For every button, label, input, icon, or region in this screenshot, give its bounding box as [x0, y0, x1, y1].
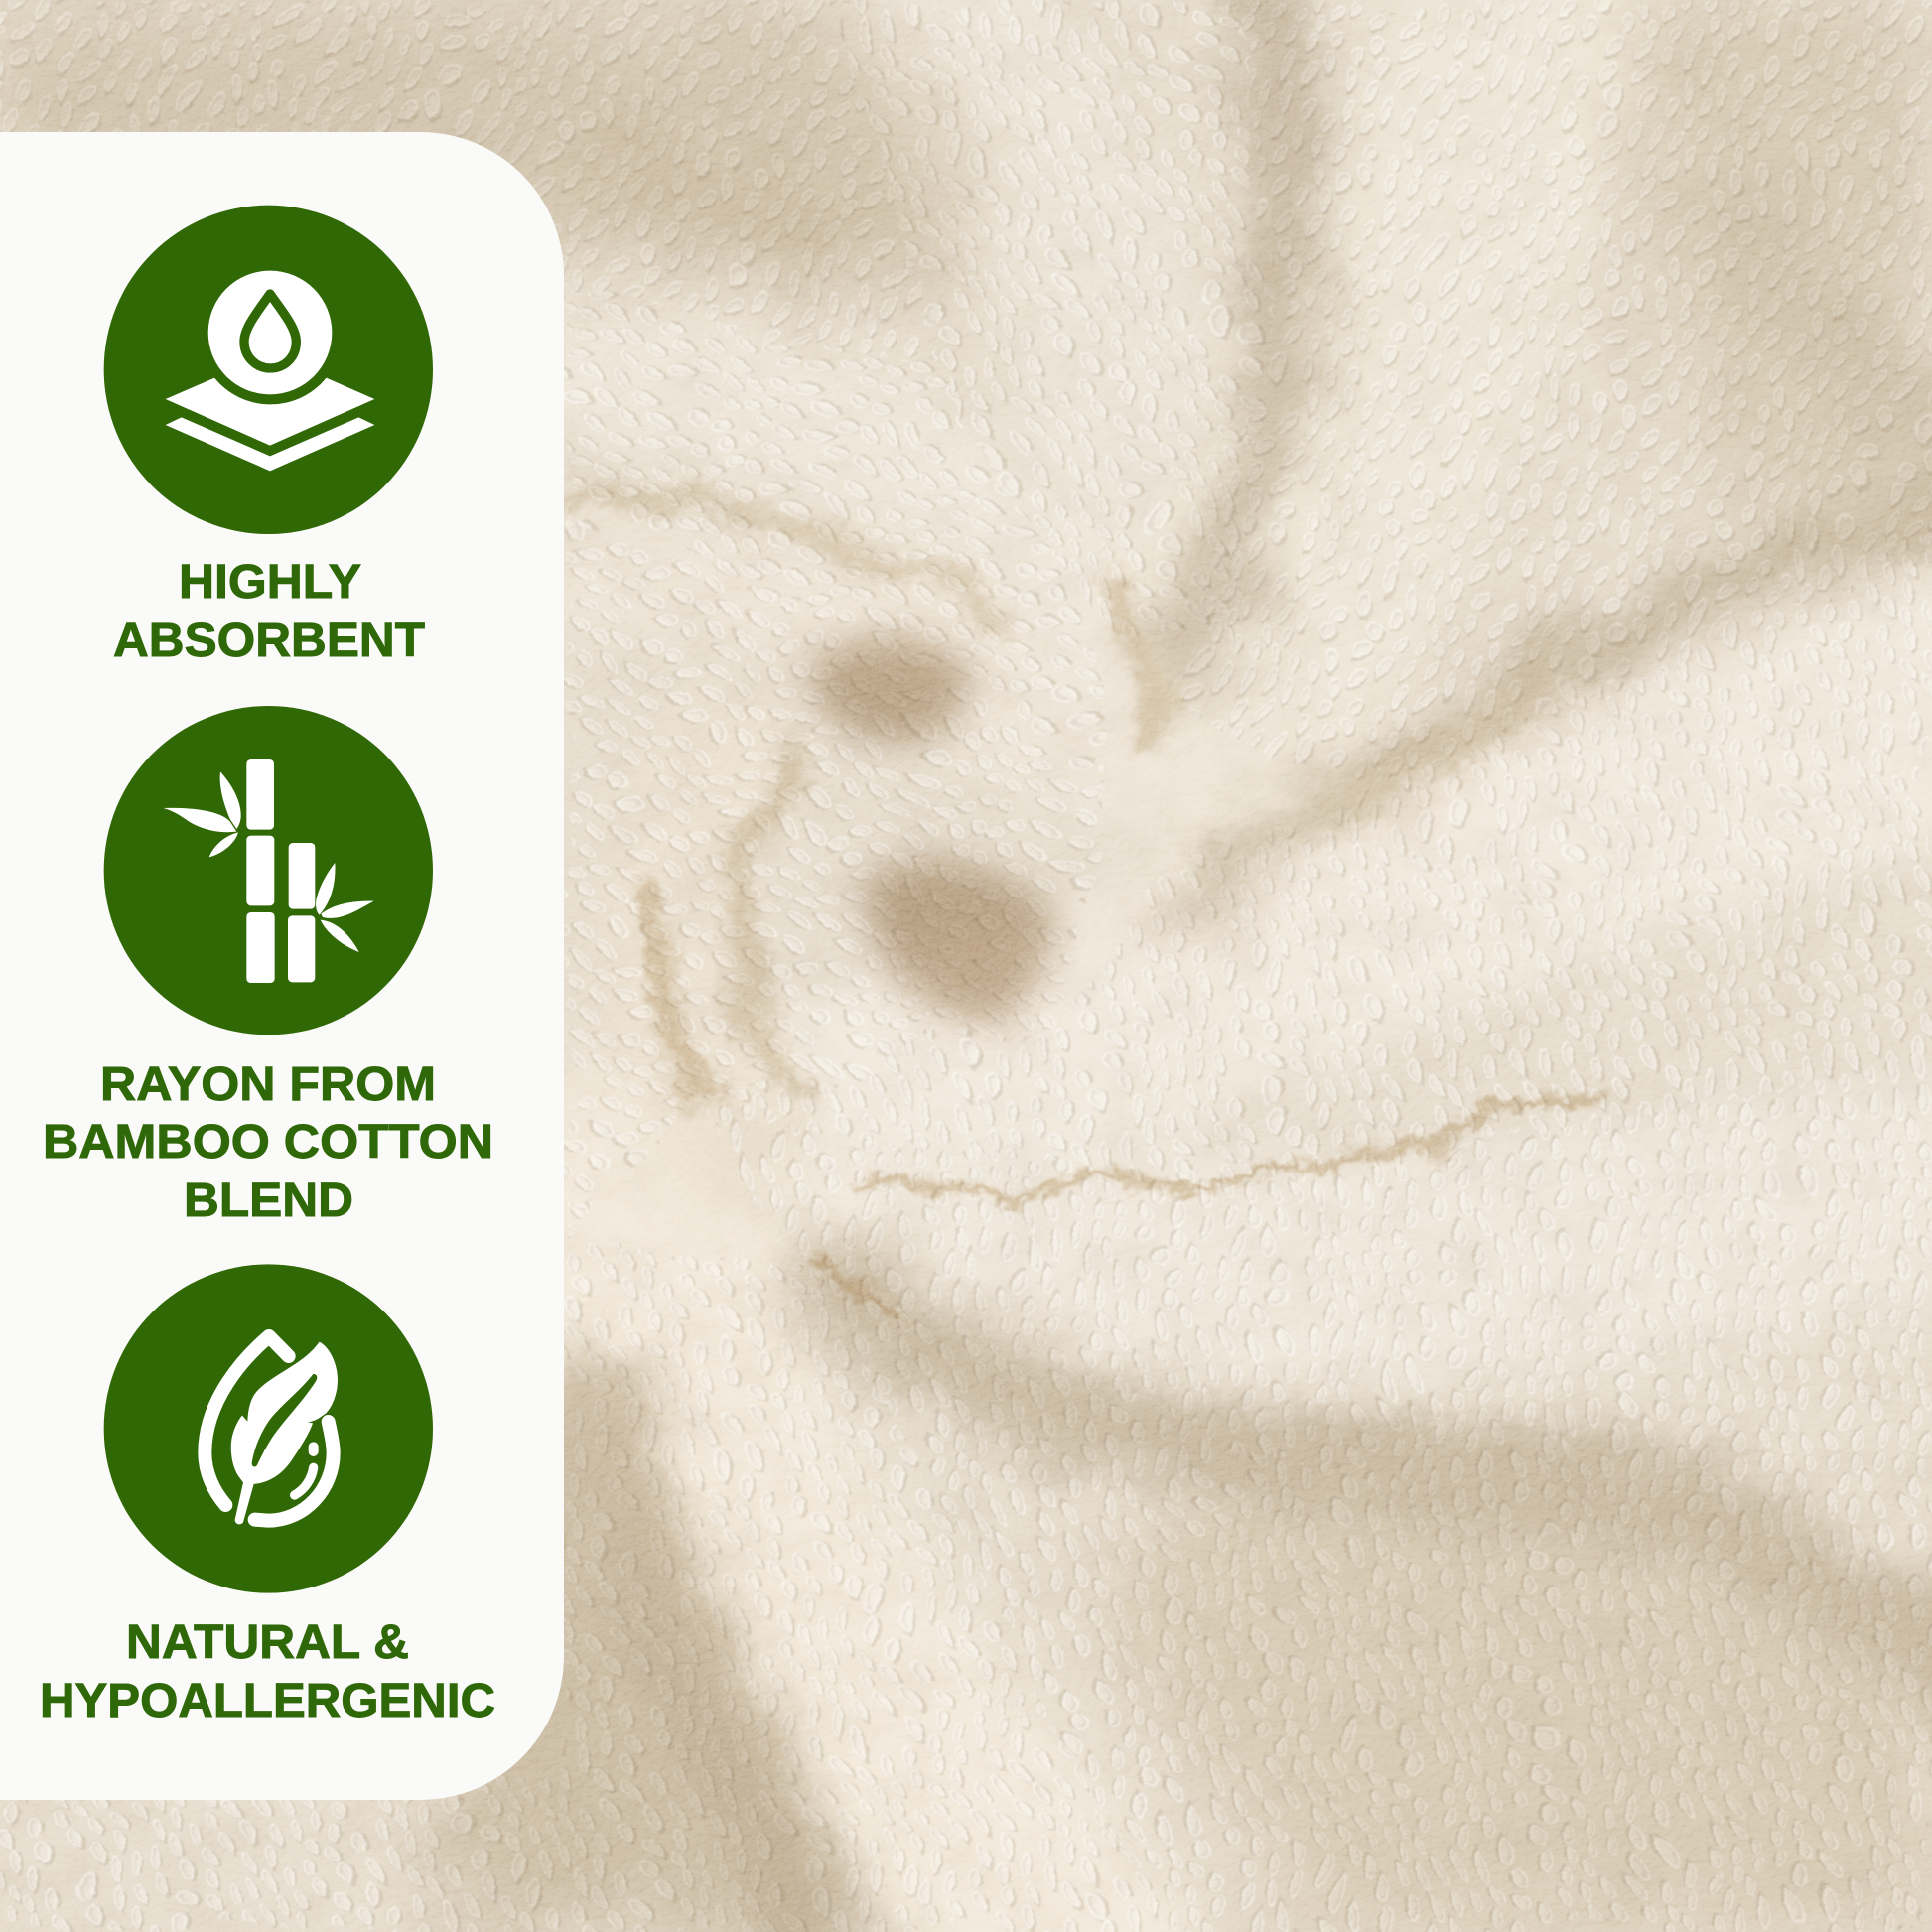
swirl strand shading [567, 498, 1148, 1097]
panel: product features [0, 132, 564, 1800]
towel highlighted folds [579, 0, 1932, 1932]
icon: water drop on layered fabric [104, 206, 433, 534]
feature: natural and hypoallergenic [40, 1264, 495, 1727]
heading: rayon from bamboo cotton blend: RAYON FROM [100, 1058, 436, 1111]
icon: bamboo stalks and leaves [104, 706, 433, 1035]
heading: natural and hypoallergenic: HYPOALLERGENIC [40, 1675, 495, 1727]
heading: natural and hypoallergenic: NATURAL & [126, 1616, 409, 1669]
towel creases [819, 1094, 1601, 1313]
feature: highly absorbent [104, 206, 433, 667]
heading: rayon from bamboo cotton blend: BAMBOO COTTON [43, 1116, 493, 1169]
icon: feather inside drop [104, 1264, 433, 1593]
towel swirl holes [807, 637, 1057, 1026]
towel fold shadows [604, 0, 1932, 1932]
heading: highly absorbent: ABSORBENT [113, 615, 425, 667]
panel card [0, 132, 564, 1800]
heading: rayon from bamboo cotton blend: BLEND [184, 1174, 353, 1227]
heading: highly absorbent: HIGHLY [179, 556, 361, 609]
feature: rayon from bamboo cotton blend [43, 706, 493, 1227]
